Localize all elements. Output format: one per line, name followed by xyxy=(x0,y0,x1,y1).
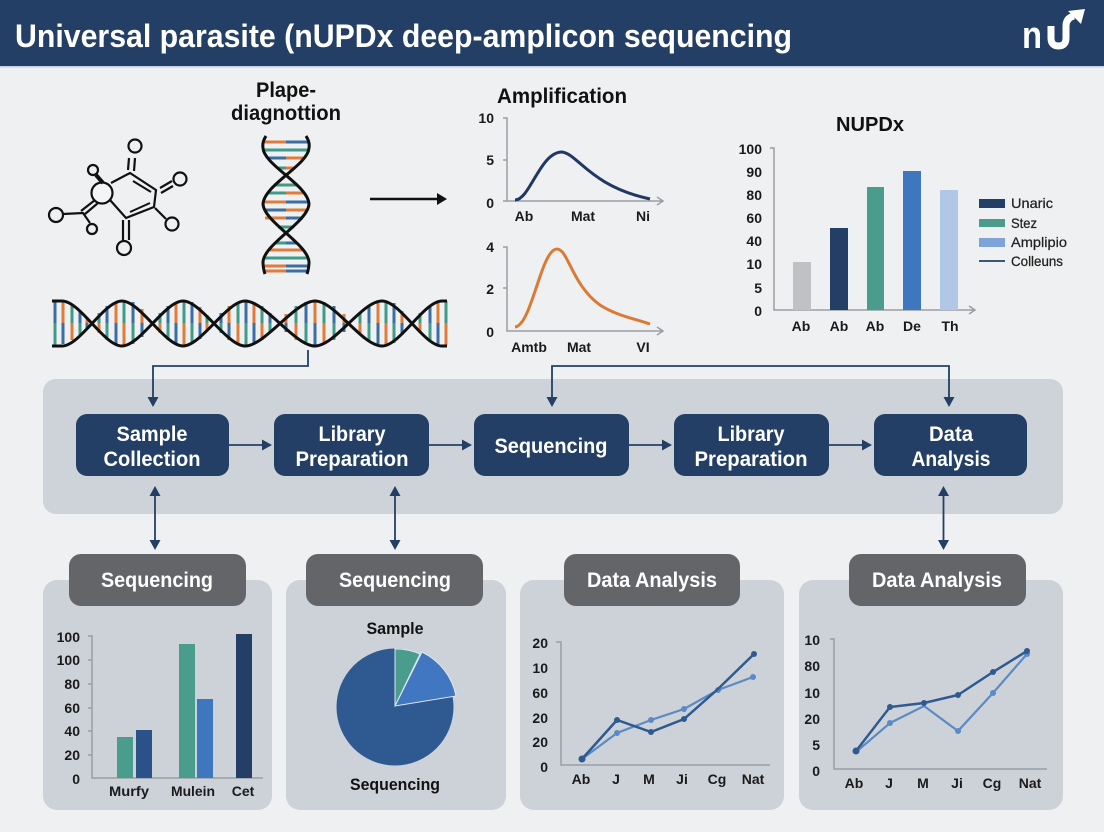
panel: data analysis line chart 2 xyxy=(799,554,1063,810)
chart: amplification curves xyxy=(478,85,663,355)
heading: NUPDx: NUPDx xyxy=(836,114,904,136)
line chart: navy curve: 0 xyxy=(486,195,494,211)
line chart: J xyxy=(885,775,893,791)
panel heading xyxy=(306,554,483,606)
icon: horizontal DNA helix xyxy=(52,301,447,346)
step: data analysis: Analysis xyxy=(912,448,990,471)
line chart: 20 xyxy=(532,635,548,651)
step: library preparation xyxy=(274,414,429,476)
panel heading xyxy=(564,554,740,606)
title: Universal parasite (nUPDx deep-amplicon sequencing xyxy=(15,18,792,54)
line chart: Nat xyxy=(1019,775,1042,791)
line chart: 0 xyxy=(540,759,548,775)
heading: plate diagnostics: Plape- xyxy=(256,79,316,102)
chart: NUPDx bar chart: 5 xyxy=(754,280,762,296)
step: sample collection: Sample xyxy=(116,423,188,446)
line chart: 20 xyxy=(532,734,548,750)
line chart: 20 xyxy=(804,711,820,727)
chart: NUPDx bar chart: 100 xyxy=(739,141,762,157)
step: library preparation 2: Preparation xyxy=(694,448,808,471)
line chart: navy curve: Mat xyxy=(571,208,595,224)
step: library preparation: Library xyxy=(318,423,386,446)
icon: molecule xyxy=(49,140,186,255)
line chart: orange curve: 0 xyxy=(486,324,494,340)
bar chart: Murfy xyxy=(109,783,149,799)
pie chart xyxy=(336,648,456,766)
step: sequencing: Sequencing xyxy=(494,435,608,458)
line chart: 20 xyxy=(532,710,548,726)
pie label: sequencing: Sequencing xyxy=(350,775,440,794)
step: library preparation 2: Library xyxy=(718,423,785,446)
panel heading: Sequencing xyxy=(101,569,213,592)
bar chart: 40 xyxy=(64,723,80,739)
line chart: M xyxy=(643,771,655,787)
bar chart: Mulein xyxy=(171,783,215,799)
chart: NUPDx bar chart: Th xyxy=(941,318,959,334)
line chart: orange curve: 2 xyxy=(486,281,494,297)
line chart: orange curve: VI xyxy=(636,339,650,355)
line chart: Nat xyxy=(742,771,765,787)
bar chart: 100 xyxy=(57,652,80,668)
heading: amplification: Amplification xyxy=(497,85,627,108)
line chart: orange curve: Amtb xyxy=(511,339,547,355)
arrow: step 1 to 2 xyxy=(229,440,272,450)
panel heading xyxy=(69,554,246,606)
chart: NUPDx bar chart: Ab xyxy=(792,318,810,334)
arrow: helix to sample collection xyxy=(148,350,308,407)
panel heading: Sequencing xyxy=(339,569,451,592)
step: data analysis xyxy=(874,414,1027,476)
chart: NUPDx bar chart: 0 xyxy=(754,303,762,319)
bar chart: 80 xyxy=(64,676,80,692)
chart: NUPDx bar chart: 90 xyxy=(746,164,762,180)
arrow: step 2 to 3 xyxy=(429,440,472,450)
line chart: M xyxy=(917,775,929,791)
legend: Colleuns xyxy=(1011,253,1063,269)
line chart: Ji xyxy=(676,771,688,787)
legend: Amplipio xyxy=(1011,234,1067,250)
chart: NUPDx bar chart: 60 xyxy=(746,210,762,226)
bar chart: 20 xyxy=(64,747,80,763)
icon: vertical DNA helix xyxy=(263,136,309,274)
chart: NUPDx bar chart: De xyxy=(903,318,921,334)
icon: logo: n xyxy=(1022,15,1042,57)
line chart: 10 xyxy=(804,685,820,701)
step: library preparation 2 xyxy=(674,414,829,476)
arrow: feedback to sequencing and data analysis xyxy=(546,366,954,407)
panel heading xyxy=(849,554,1026,606)
line chart: 80 xyxy=(804,658,820,674)
line chart: navy curve xyxy=(478,110,663,224)
chart: NUPDx bar chart xyxy=(739,114,1067,334)
header bar xyxy=(0,0,1104,68)
panel: sequencing pie chart xyxy=(286,554,506,810)
line chart: Ab xyxy=(572,771,590,787)
panel: workflow band xyxy=(43,379,1063,514)
chart: NUPDx bar chart: 10 xyxy=(746,256,762,272)
chart: NUPDx bar chart: 80 xyxy=(746,187,762,203)
arrow: double link 2 xyxy=(390,486,400,550)
bar chart: 100 xyxy=(57,629,80,645)
line chart: 10 xyxy=(804,632,820,648)
legend: Stez xyxy=(1011,215,1037,231)
line chart xyxy=(804,632,1047,791)
arrow: double link 3 xyxy=(938,486,949,550)
bar chart: Cet xyxy=(232,783,255,799)
arrow: double link 1 xyxy=(150,486,160,550)
legend: Unaric xyxy=(1011,195,1053,211)
step: sequencing xyxy=(474,414,629,476)
line chart: navy curve: 5 xyxy=(486,152,494,168)
icon: logo xyxy=(1022,9,1085,57)
bar chart: 60 xyxy=(64,700,80,716)
line chart: 0 xyxy=(812,763,820,779)
line chart: navy curve: 10 xyxy=(478,110,494,126)
line chart: Cg xyxy=(708,771,726,787)
line chart: orange curve: Mat xyxy=(567,339,591,355)
bar chart: 0 xyxy=(72,771,80,787)
panel heading: Data Analysis xyxy=(587,569,717,592)
line chart: Cg xyxy=(983,775,1001,791)
chart: NUPDx bar chart: 40 xyxy=(746,233,762,249)
step: sample collection: Collection xyxy=(104,448,200,471)
arrow: step 4 to 5 xyxy=(829,440,872,450)
chart: NUPDx bar chart: Ab xyxy=(830,318,848,334)
line chart: orange curve: 4 xyxy=(486,239,494,255)
chart: NUPDx bar chart: Ab xyxy=(866,318,884,334)
panel heading: Data Analysis xyxy=(872,569,1002,592)
line chart: J xyxy=(612,771,620,787)
line chart: Ji xyxy=(951,775,963,791)
arrow: step 3 to 4 xyxy=(629,440,672,450)
heading: plate diagnostics: diagnottion xyxy=(231,102,341,125)
line chart: 10 xyxy=(532,660,548,676)
line chart: Ab xyxy=(845,775,863,791)
line chart: navy curve: Ab xyxy=(515,208,533,224)
arrow: to amplification xyxy=(370,193,447,205)
bar chart xyxy=(57,629,263,799)
line chart: 60 xyxy=(532,685,548,701)
pie label: sample: Sample xyxy=(366,619,424,638)
heading: plate diagnostics xyxy=(231,79,341,125)
line chart: orange curve xyxy=(486,239,663,355)
legend xyxy=(979,195,1067,269)
panel: data analysis line chart 1 xyxy=(520,554,784,810)
step: data analysis: Data xyxy=(929,423,973,446)
line chart xyxy=(532,635,770,787)
panel: sequencing bar chart xyxy=(43,554,272,810)
step: sample collection xyxy=(76,414,229,476)
line chart: navy curve: Ni xyxy=(636,208,650,224)
line chart: 5 xyxy=(812,737,820,753)
step: library preparation: Preparation xyxy=(296,448,408,471)
